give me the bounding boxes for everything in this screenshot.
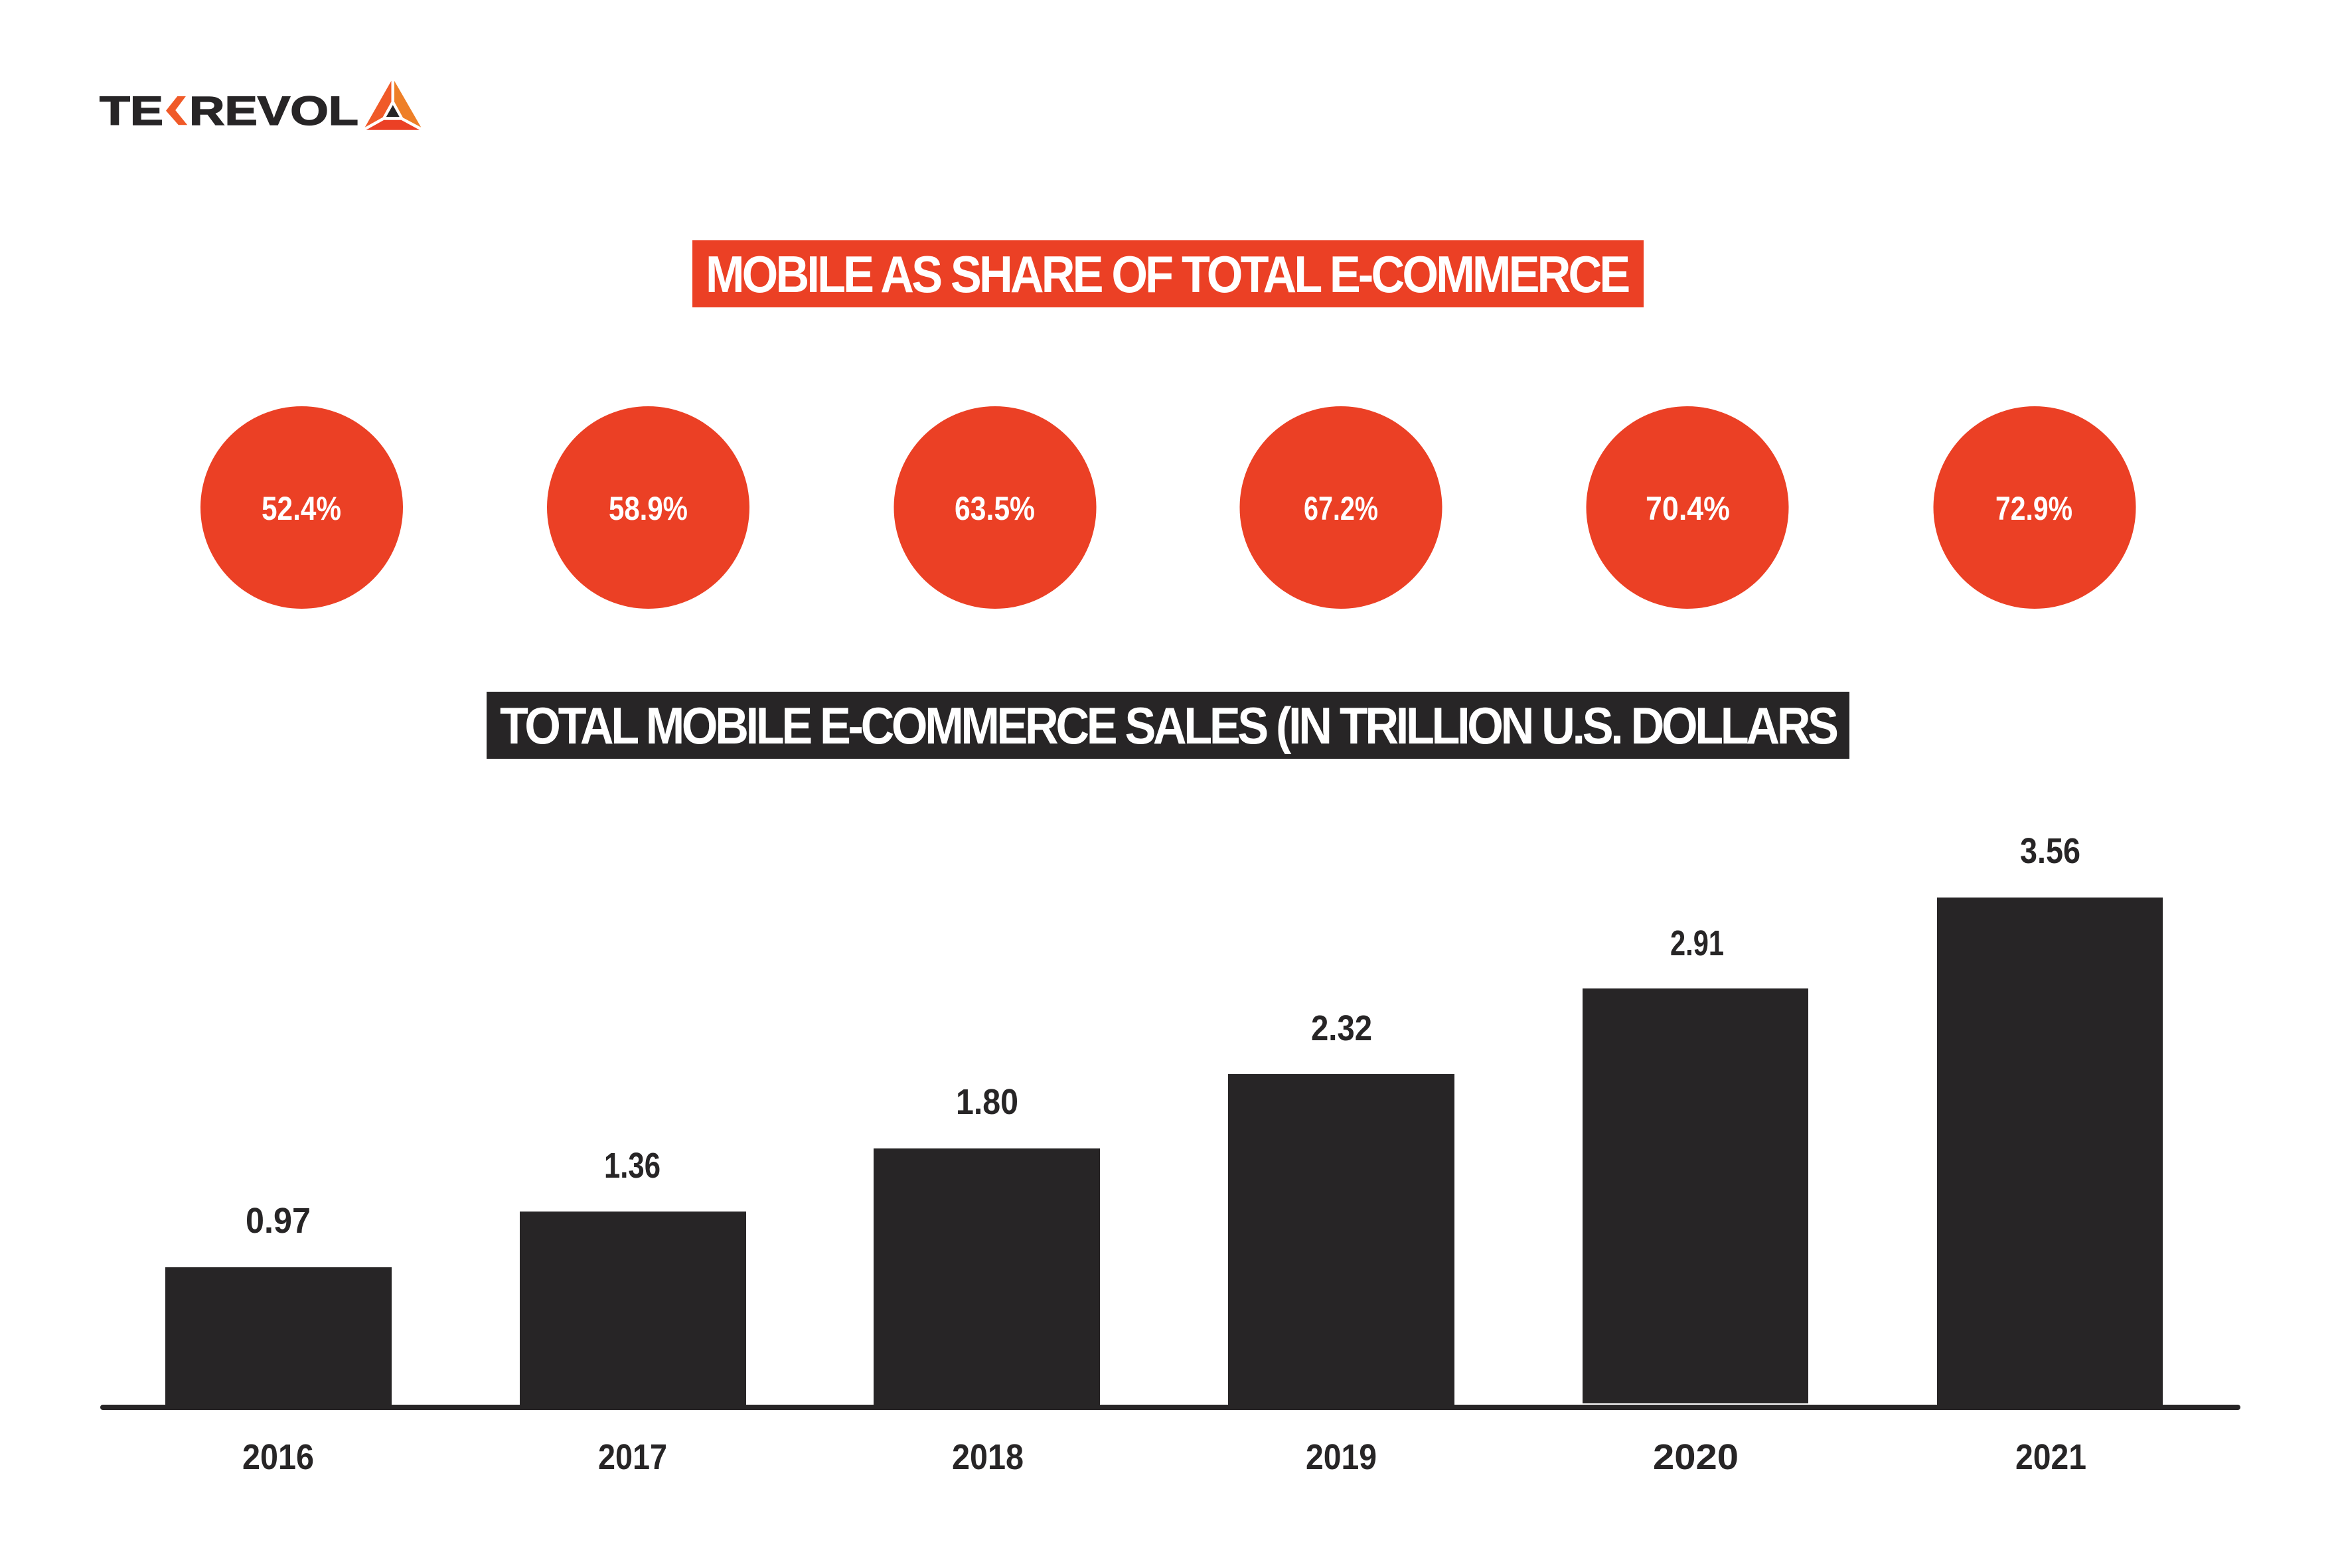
circle: 2020 share (1587, 406, 1788, 609)
circle: 2016 share (200, 406, 403, 609)
circle: 2018 share (894, 406, 1097, 609)
heading: mobile as share of total e-commerce: MOBILE AS SHARE OF TOTAL E-COMMERCE (706, 246, 1630, 303)
circle: 2021 share: 72.9% (1995, 490, 2072, 527)
bar: 2017: 2017 (598, 1437, 667, 1477)
circle: 2017 share: 58.9% (609, 490, 688, 527)
circle: 2017 share (547, 406, 749, 609)
bar: 2019 (1228, 1008, 1454, 1477)
panel: mobile share circles (200, 406, 2136, 609)
bar: 2020: 2.91 (1670, 923, 1724, 963)
bar: 2019: 2.32 (1311, 1008, 1372, 1048)
circle: 2016 share: 52.4% (262, 490, 341, 527)
bar: 2018: 2018 (952, 1437, 1024, 1477)
bar: 2017 (520, 1146, 746, 1477)
bar: 2016: 0.97 (246, 1201, 311, 1241)
heading: total mobile e-commerce sales: TOTAL MOBILE E-COMMERCE SALES (IN TRILLION U.S. DOLLARS (500, 697, 1839, 755)
circle: 2020 share: 70.4% (1646, 490, 1730, 527)
bar: 2017: 1.36 (604, 1146, 661, 1186)
logo icon: triangle (365, 81, 421, 130)
bar: 2018: 1.80 (956, 1082, 1018, 1122)
bar: 2020 (1583, 923, 1808, 1477)
bar: 2018 (874, 1082, 1100, 1477)
bar: 2020: 2020 (1653, 1437, 1739, 1477)
bar: 2019: 2019 (1306, 1437, 1377, 1477)
bar: 2016: 2016 (242, 1437, 314, 1477)
bar: 2021 (1937, 831, 2163, 1477)
circle: 2021 share (1933, 406, 2136, 609)
axis line (100, 1405, 2240, 1410)
logo: TekRevol (100, 81, 421, 133)
circle: 2019 share: 67.2% (1304, 490, 1378, 527)
bar chart: mobile e-commerce sales (100, 831, 2240, 1477)
bar: 2021: 3.56 (2020, 831, 2080, 871)
circle: 2018 share: 63.5% (955, 490, 1035, 527)
logo wordmark: TE (100, 88, 163, 133)
logo wordmark (100, 88, 358, 133)
bar: 2016 (165, 1201, 392, 1477)
logo wordmark: REVOL (189, 88, 358, 133)
circle: 2019 share (1240, 406, 1442, 609)
bar: 2021: 2021 (2015, 1437, 2086, 1477)
